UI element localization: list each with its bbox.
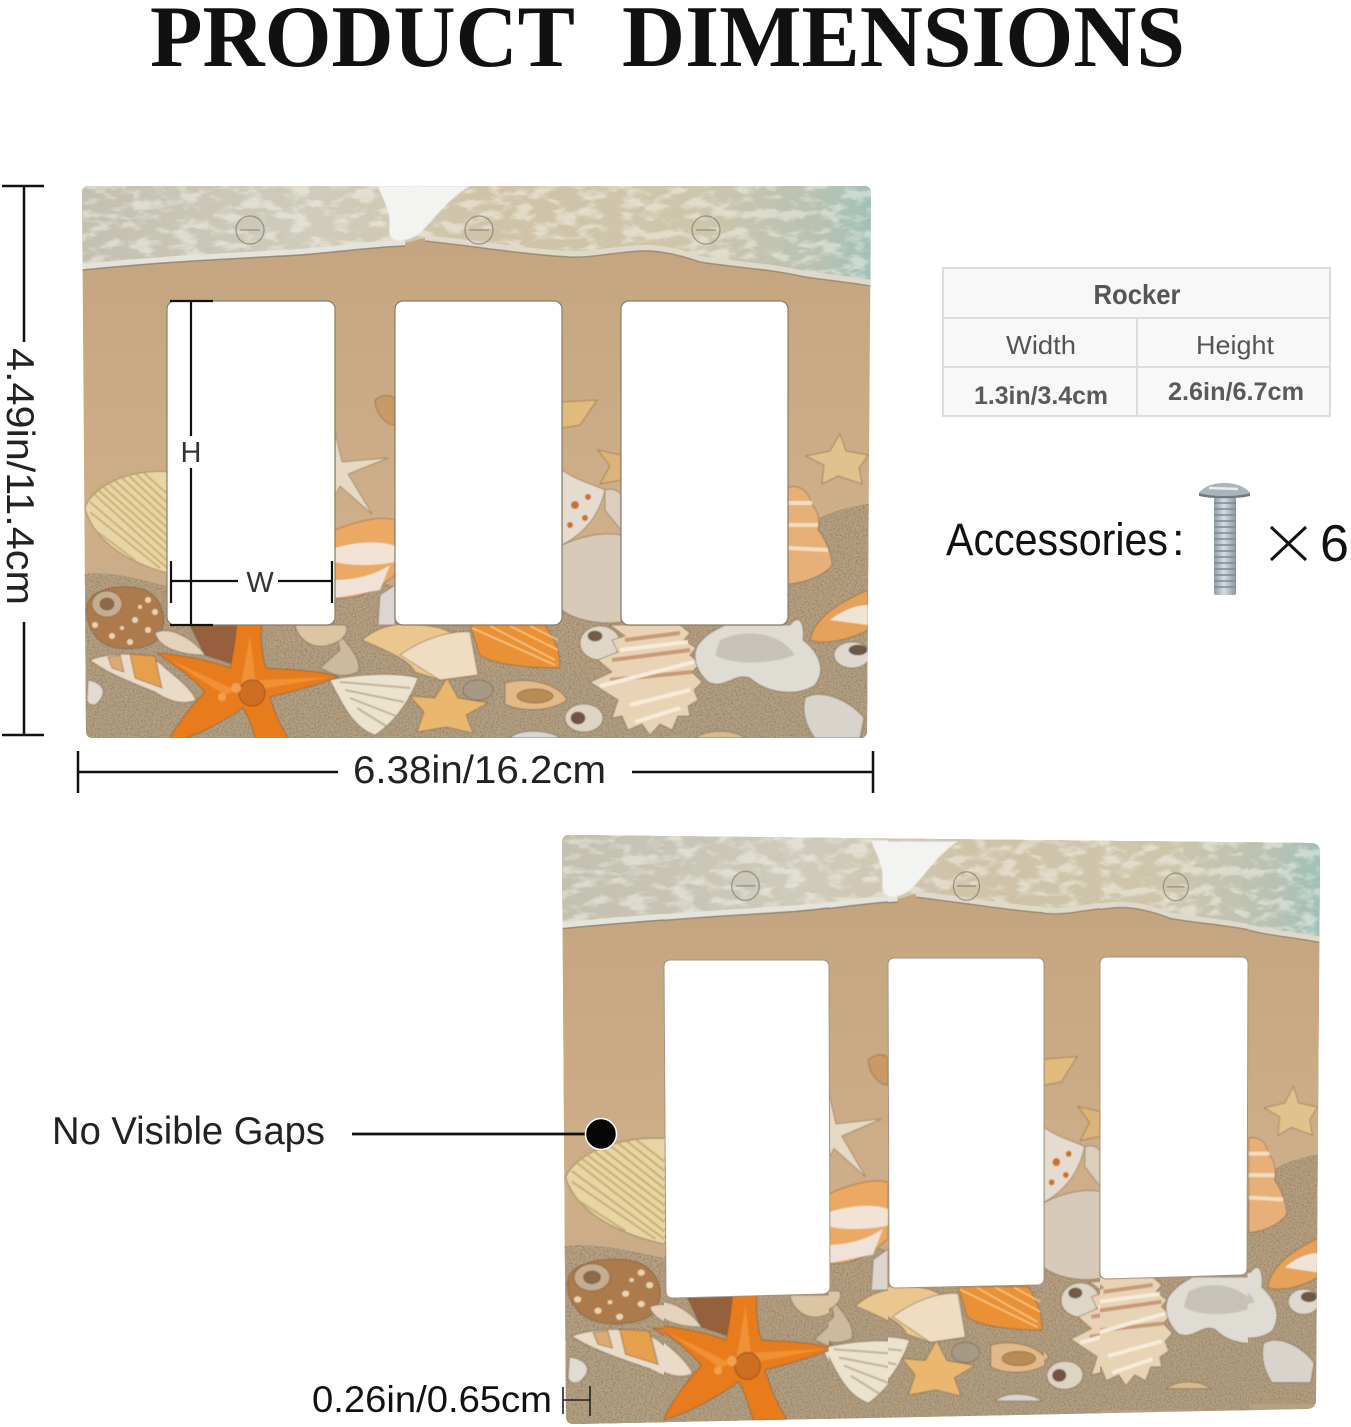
callout: no visible gaps — [52, 1110, 616, 1153]
dimension: opening height — [170, 301, 213, 625]
table: rocker opening size: 2.6in/6.7cm — [1168, 378, 1304, 406]
accessories label: : — [1172, 514, 1185, 565]
title — [150, 0, 1185, 86]
illustration: spiny conch — [590, 625, 702, 735]
illustration: brown spiral shell — [87, 587, 164, 649]
illustration: orange starfish — [157, 620, 338, 745]
illustration: white heart shell — [695, 620, 821, 692]
openings in front plate — [167, 301, 788, 625]
dimension: plate height — [0, 186, 44, 735]
accessories label: Accessories — [946, 514, 1168, 565]
illustration: yellow scallop — [85, 471, 172, 574]
icon: mounting screw — [1199, 483, 1250, 595]
table: rocker opening size: Height — [1196, 330, 1275, 360]
panel: angled view wall plate — [562, 835, 1320, 1424]
dimension: plate width: 6.38in/16.2cm — [353, 749, 606, 792]
icon: screw holes — [236, 216, 720, 244]
dimension: plate thickness: 0.26in/0.65cm — [312, 1379, 552, 1420]
illustration: right side shells — [788, 434, 870, 738]
illustration: small shells on sand — [505, 626, 745, 738]
illustration: centre shells between openings — [375, 395, 621, 623]
illustration: small golden starfish — [410, 678, 488, 733]
dimension: opening width — [171, 561, 332, 603]
illustration: white starfish and orange whelk — [335, 432, 395, 625]
dimension: plate width — [78, 749, 873, 793]
illustration: white fan shell — [330, 674, 418, 735]
table: rocker opening size: 1.3in/3.4cm — [974, 382, 1108, 410]
accessories quantity: 6 — [1320, 515, 1349, 573]
callout: no visible gaps: No Visible Gaps — [52, 1110, 325, 1153]
illustration: spindle shell — [90, 654, 196, 702]
table: rocker opening size — [943, 268, 1330, 416]
openings in angled plate — [664, 957, 1248, 1298]
dimension: opening width: W — [246, 567, 274, 599]
illustration: shells on sand — [85, 395, 870, 745]
table: rocker opening size: Rocker — [1094, 279, 1181, 310]
dimension: opening height: H — [181, 437, 201, 469]
panel: front view wall plate — [60, 170, 900, 760]
accessories quantity — [1271, 515, 1349, 573]
illustration: spiky shell and orange fan — [362, 624, 560, 700]
table: rocker opening size: Width — [1006, 330, 1076, 360]
illustration: small shells near first opening — [87, 625, 359, 705]
